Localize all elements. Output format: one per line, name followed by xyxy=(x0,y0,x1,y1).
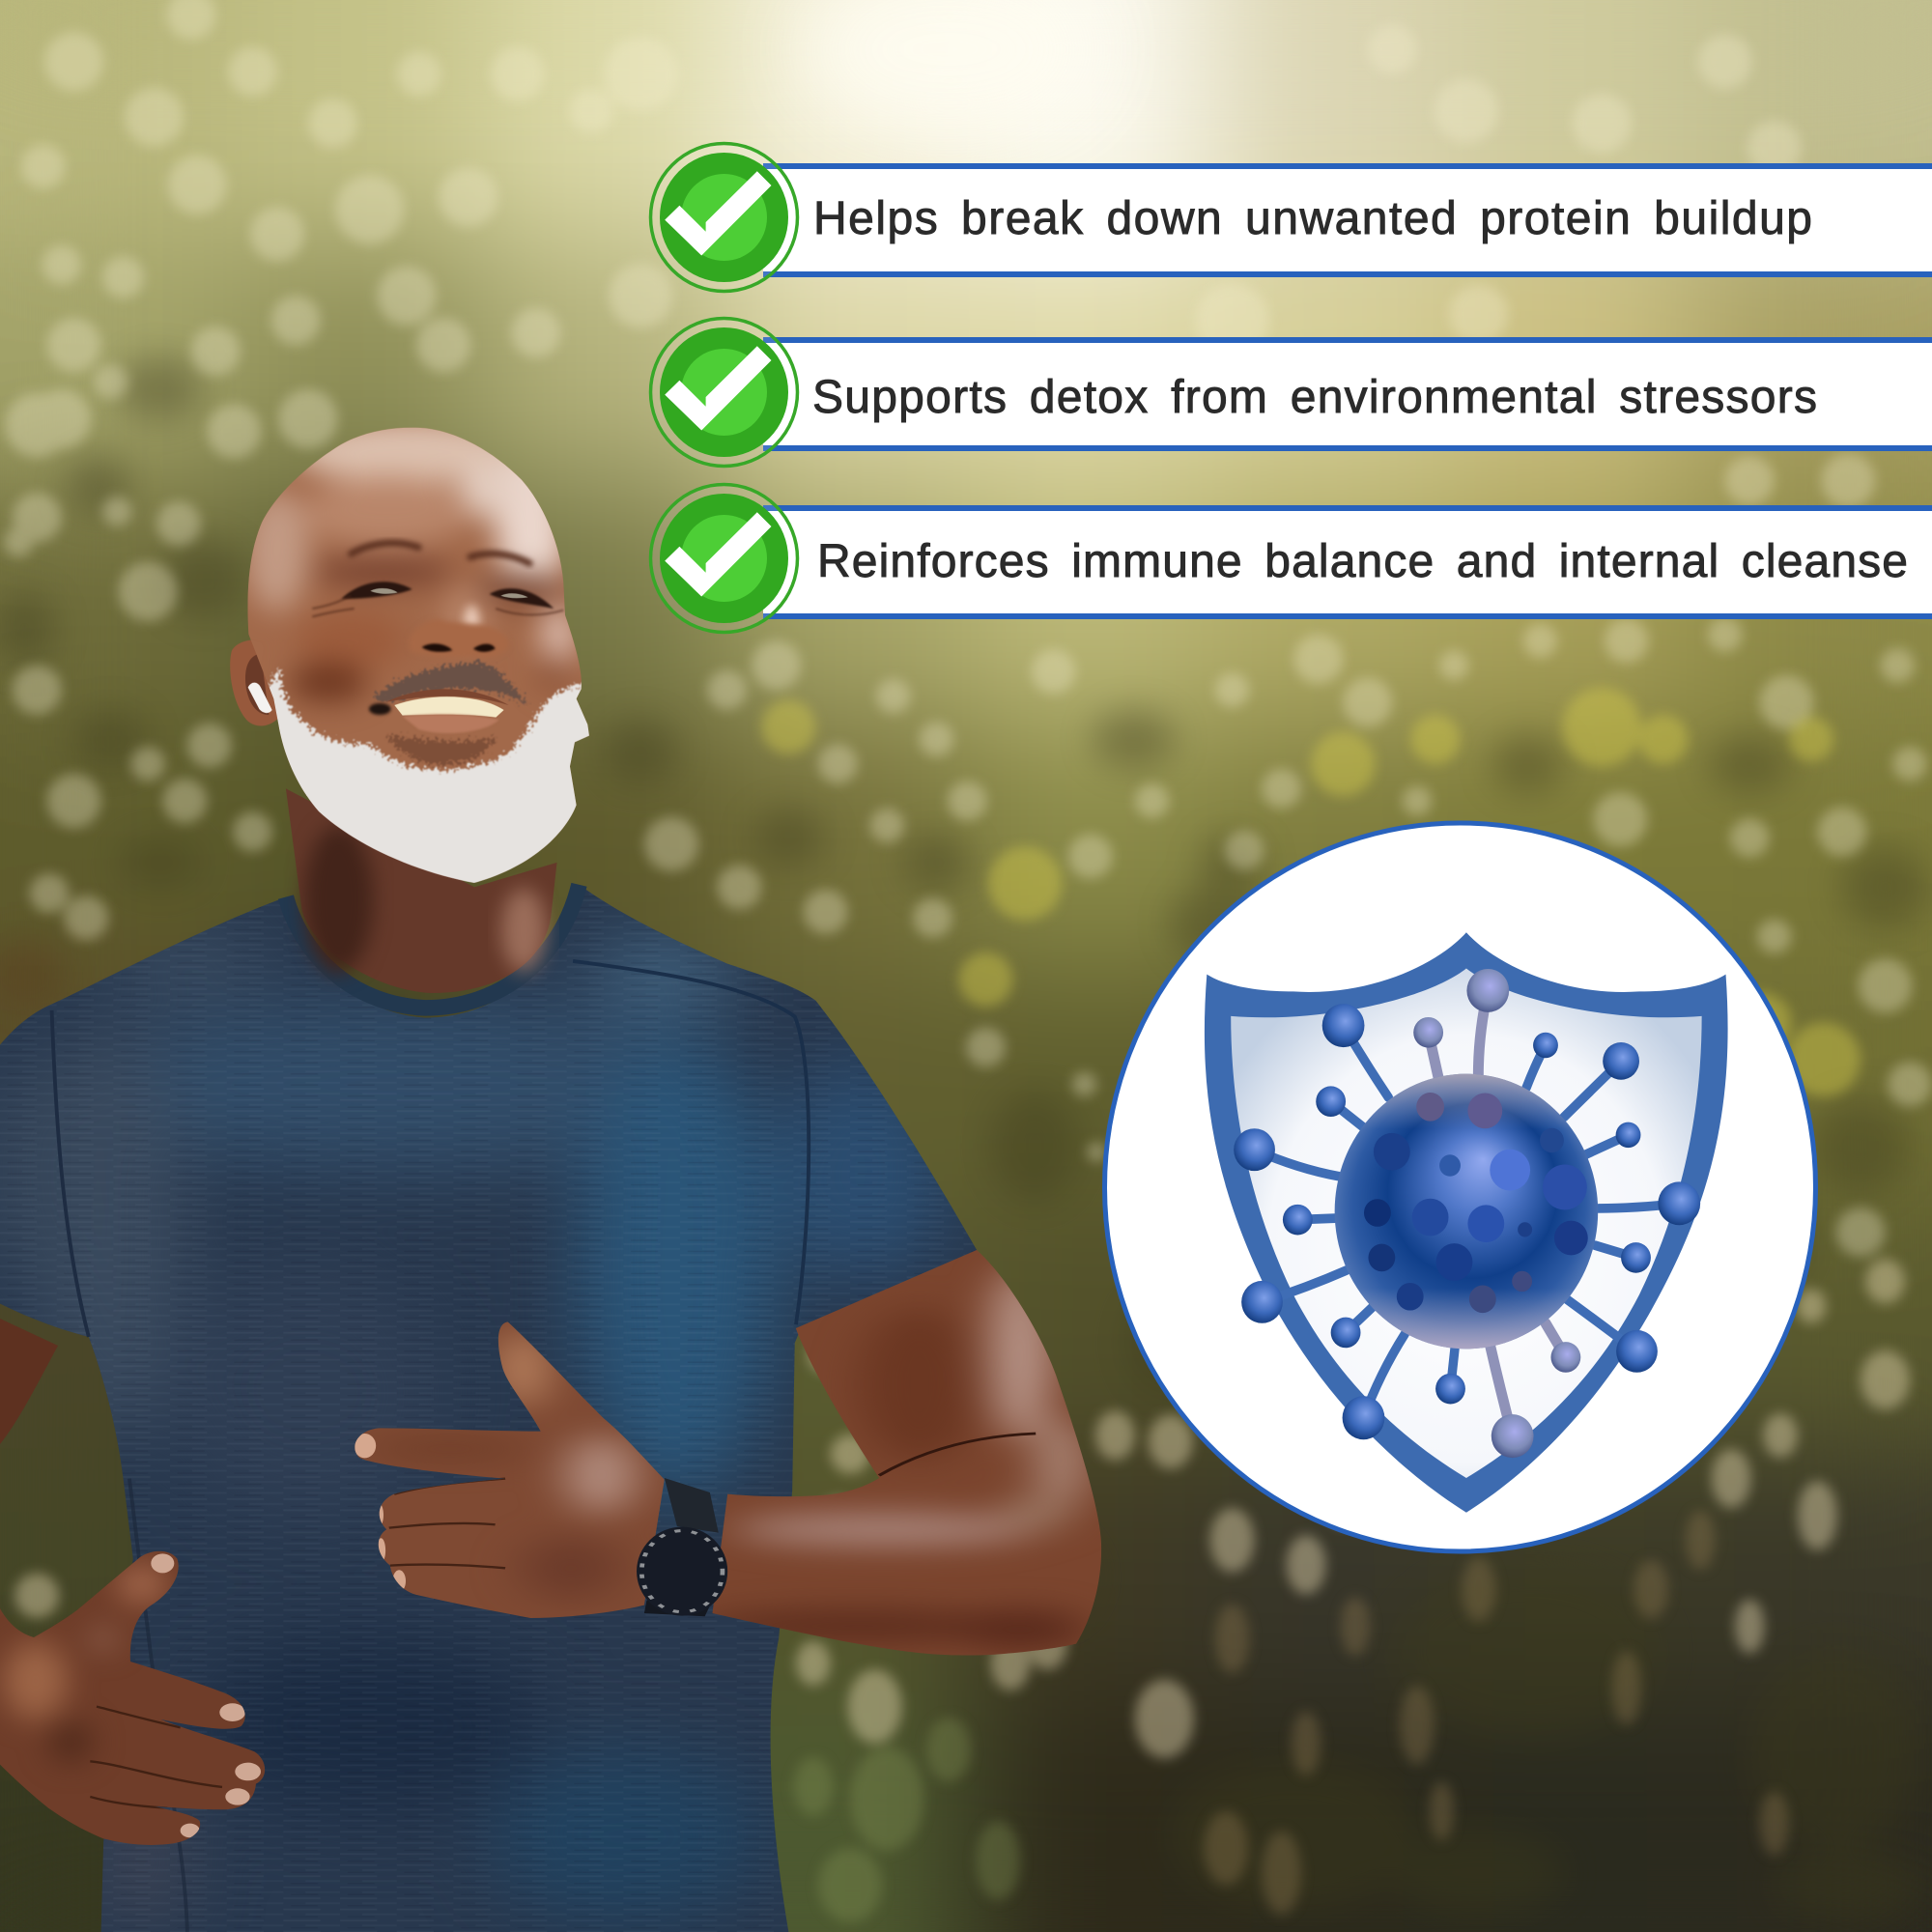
benefit text 2: Supports detox from environmental stressors xyxy=(812,372,1817,423)
photo: smiling man jogging xyxy=(0,418,1137,1932)
brows xyxy=(351,543,529,563)
head xyxy=(230,418,596,892)
virus spike balls xyxy=(1234,969,1700,1458)
lower lip xyxy=(403,714,499,733)
teeth xyxy=(394,696,504,718)
check badge 1 xyxy=(651,143,798,292)
mustache xyxy=(374,662,528,705)
right arm xyxy=(713,1250,1101,1656)
virus craters xyxy=(1364,1093,1588,1313)
upper lip xyxy=(386,689,509,705)
benefit banner 1 xyxy=(763,163,1932,277)
left forearm behind body xyxy=(0,1319,58,1444)
benefit banner 3 xyxy=(763,505,1932,619)
skin shading xyxy=(244,418,577,702)
mouth corners xyxy=(369,703,391,715)
watch xyxy=(637,1478,727,1616)
neck xyxy=(286,788,557,993)
virus sheen xyxy=(1335,1074,1598,1349)
shield frame xyxy=(1205,932,1728,1513)
centre hand xyxy=(355,1321,665,1618)
lower left hand xyxy=(0,1546,273,1852)
shield inner panel xyxy=(1231,968,1702,1478)
virus body xyxy=(1335,1074,1598,1349)
nostrils xyxy=(422,643,496,652)
ear xyxy=(230,639,278,725)
shield with virus xyxy=(1205,932,1728,1513)
check badge 2 xyxy=(651,319,798,466)
white beard xyxy=(261,667,596,892)
benefit banner 2 xyxy=(763,337,1932,451)
immune shield medallion xyxy=(1105,823,1816,1551)
elbow crease xyxy=(879,1434,1036,1475)
t-shirt xyxy=(0,863,985,1932)
virus spikes xyxy=(1255,990,1679,1436)
check badge 3 xyxy=(651,485,798,632)
benefit text 1: Helps break down unwanted protein buildup xyxy=(813,193,1812,244)
earbud xyxy=(248,683,272,713)
benefit text 3: Reinforces immune balance and internal cleanse xyxy=(817,536,1908,587)
eyes xyxy=(341,582,554,609)
soul patch xyxy=(386,734,496,765)
nose xyxy=(409,619,509,658)
